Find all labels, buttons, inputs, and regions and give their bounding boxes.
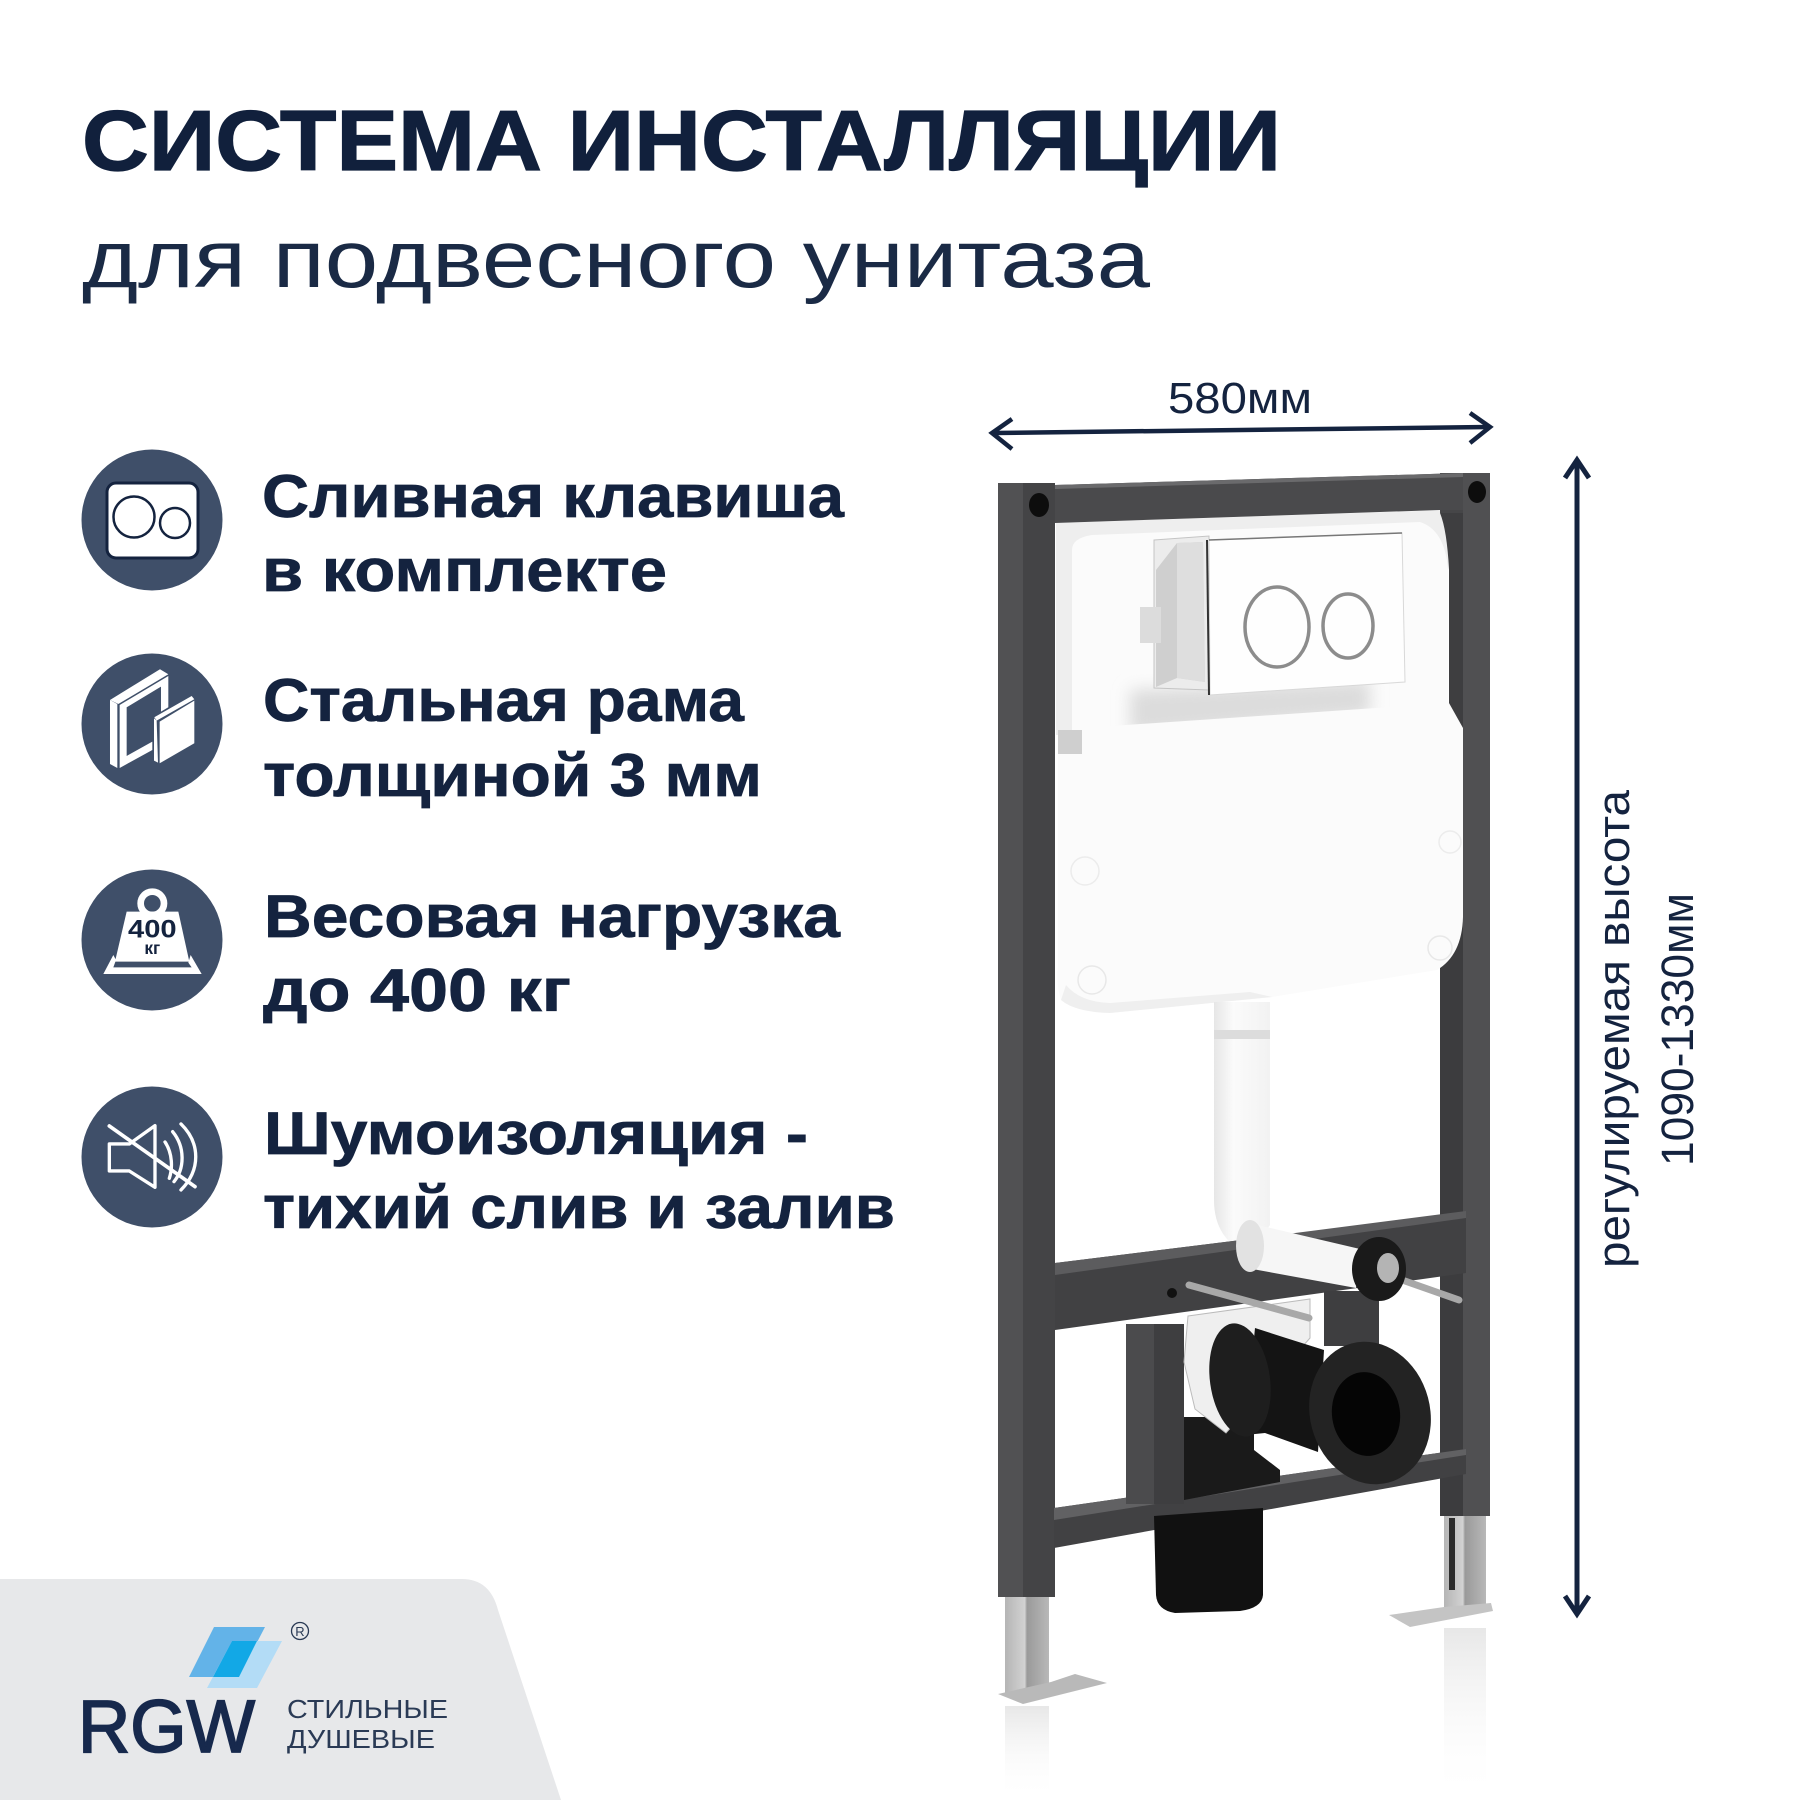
horizontal white pipe with cap [1189, 1220, 1459, 1318]
frame reflections [1005, 1628, 1486, 1800]
logo: RGW wordmark: RGW [78, 1685, 255, 1768]
feature: weight load [82, 870, 841, 1024]
subtitle: для подвесного унитаза [82, 214, 1150, 305]
footer panel with logo [0, 1579, 561, 1800]
feature: flush button [82, 450, 845, 604]
icon: muted speaker [82, 1086, 222, 1228]
feature text: flush button: Сливная клавиша [262, 463, 845, 530]
white flush pipe [1214, 1002, 1270, 1255]
steel feet [998, 1516, 1493, 1704]
height label: 1090-1330мм [1652, 893, 1703, 1166]
logo: tagline: ДУШЕВЫЕ [287, 1724, 435, 1754]
icon: flush button [82, 450, 222, 590]
lower cross bars [1054, 1211, 1466, 1548]
logo: registered mark: R [295, 1624, 305, 1639]
feature: noise insulation [82, 1086, 895, 1241]
lower cistern tank [1057, 703, 1463, 1013]
feature text: steel frame: Стальная рама [263, 667, 745, 734]
icon: weight: кг [144, 938, 160, 958]
logo: tagline [287, 1694, 448, 1754]
frame posts and top bar [998, 473, 1490, 1597]
product: installation frame [998, 473, 1493, 1800]
feature text: steel frame: толщиной 3 мм [263, 742, 762, 809]
logo: tagline: СТИЛЬНЫЕ [287, 1694, 448, 1724]
height label [1588, 789, 1703, 1268]
feature text: weight load: Весовая нагрузка [264, 883, 841, 950]
flush plate assembly [1140, 533, 1405, 695]
white pipe bracket [1184, 1299, 1310, 1433]
height dimension arrow [1565, 460, 1589, 1614]
black toilet connector [1202, 1319, 1447, 1498]
upper cistern panel [1056, 510, 1463, 735]
logo: RGW mark [189, 1627, 282, 1688]
title: СИСТЕМА ИНСТАЛЛЯЦИИ [82, 94, 1281, 189]
feature text: flush button: в комплекте [262, 537, 667, 604]
black drain elbow [1154, 1417, 1280, 1613]
feature text: weight load: до 400 кг [263, 957, 571, 1024]
width label: 580мм [1168, 374, 1312, 423]
icon: weight [82, 870, 222, 1010]
feature text: noise insulation [263, 1100, 895, 1241]
icon: steel frame [82, 654, 222, 794]
feature: steel frame [82, 654, 762, 809]
feature text: steel frame [263, 667, 762, 809]
height label: регулируемая высота [1588, 789, 1639, 1268]
feature text: noise insulation: Шумоизоляция - [264, 1100, 808, 1167]
logo: registered mark [292, 1622, 308, 1640]
feature text: flush button [262, 463, 845, 604]
icon: weight: 400 [128, 916, 177, 943]
feature text: noise insulation: тихий слив и залив [263, 1174, 895, 1241]
width dimension arrow [992, 413, 1490, 449]
feature text: weight load [263, 883, 841, 1024]
